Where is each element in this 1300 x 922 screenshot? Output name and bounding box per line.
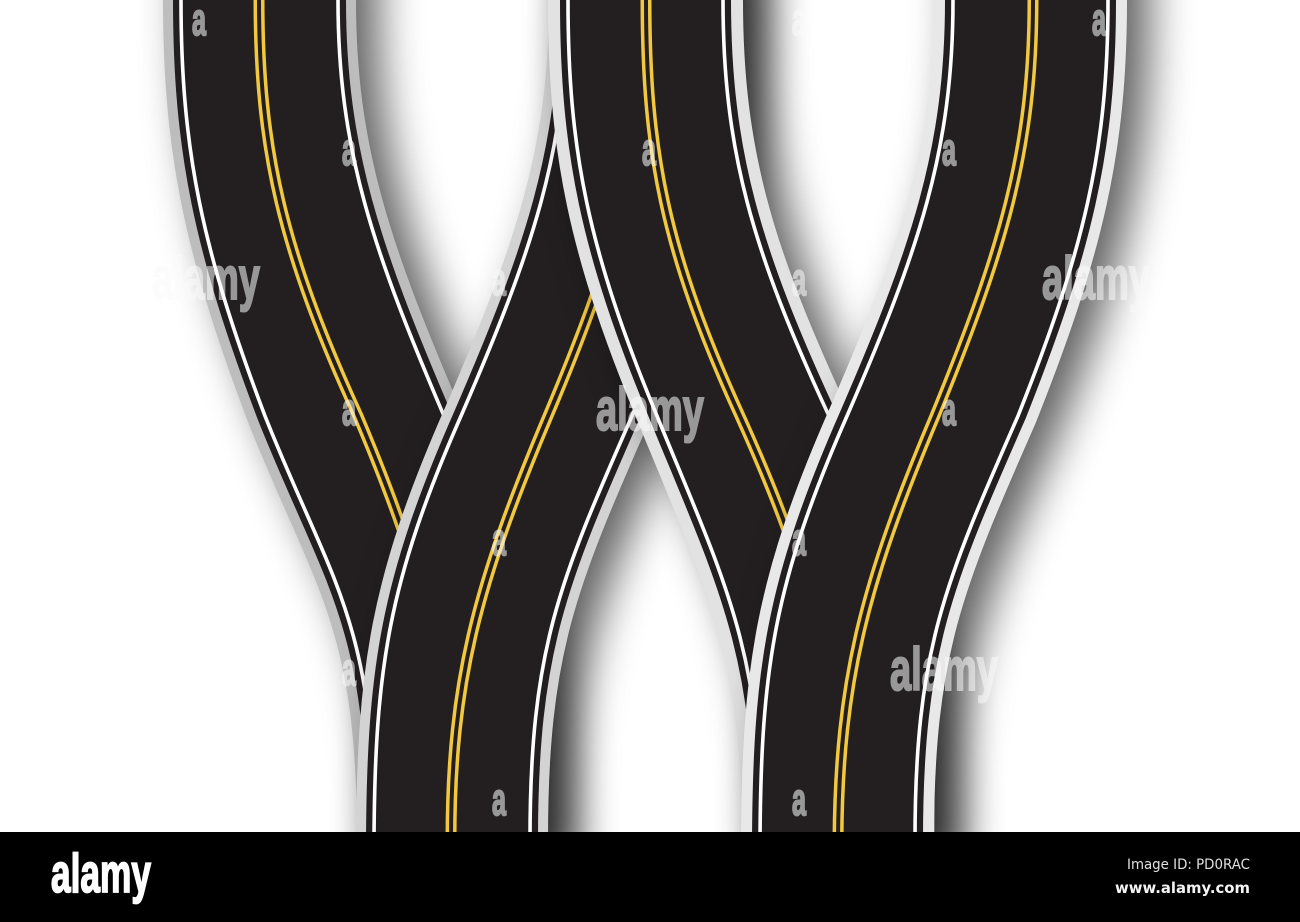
road shadow [782,0,1130,852]
watermark: repeated stock-photo marks: a [492,774,507,825]
double yellow centre line [451,0,646,840]
footer bar [0,832,1300,922]
double yellow centre line [259,0,452,840]
footer logo: alamy [51,842,151,904]
watermark: repeated stock-photo marks: a [792,254,807,305]
watermark: repeated stock-photo marks: a [942,124,957,175]
double yellow centre line [646,0,838,840]
watermark: repeated stock-photo marks: alamy [596,376,704,443]
watermark: repeated stock-photo marks: alamy [890,636,998,703]
website: www.alamy.com [1115,879,1250,897]
watermark: repeated stock-photo marks: a [492,514,507,565]
watermark: repeated stock-photo marks: a [942,384,957,435]
road: back left lane [181,0,552,852]
road surface [374,0,722,840]
road shadow [590,0,937,852]
road: front right lane crossing over the third [760,0,1130,852]
road surface [760,0,1108,840]
watermark: repeated stock-photo marks: alamy [1042,245,1150,312]
watermark: repeated stock-photo marks: alamy [152,245,260,312]
watermark: repeated stock-photo marks: a [792,774,807,825]
road shadow [203,0,552,852]
road: second lane crossing over the first [374,0,744,852]
watermark: repeated stock-photo marks: a [492,254,507,305]
road surface [181,0,530,840]
watermark: repeated stock-photo marks: a [642,124,657,175]
watermark: repeated stock-photo marks: a [342,644,357,695]
watermark: repeated stock-photo marks: a [342,384,357,435]
watermark: repeated stock-photo marks: a [342,124,357,175]
road surface [568,0,915,840]
image id: Image ID: PD0RAC [1127,857,1250,873]
road: third lane crossing over the second [568,0,937,852]
road shadow [396,0,744,852]
watermark: repeated stock-photo marks: a [792,514,807,565]
double yellow centre line [838,0,1033,840]
watermark: repeated stock-photo marks [152,0,1150,825]
